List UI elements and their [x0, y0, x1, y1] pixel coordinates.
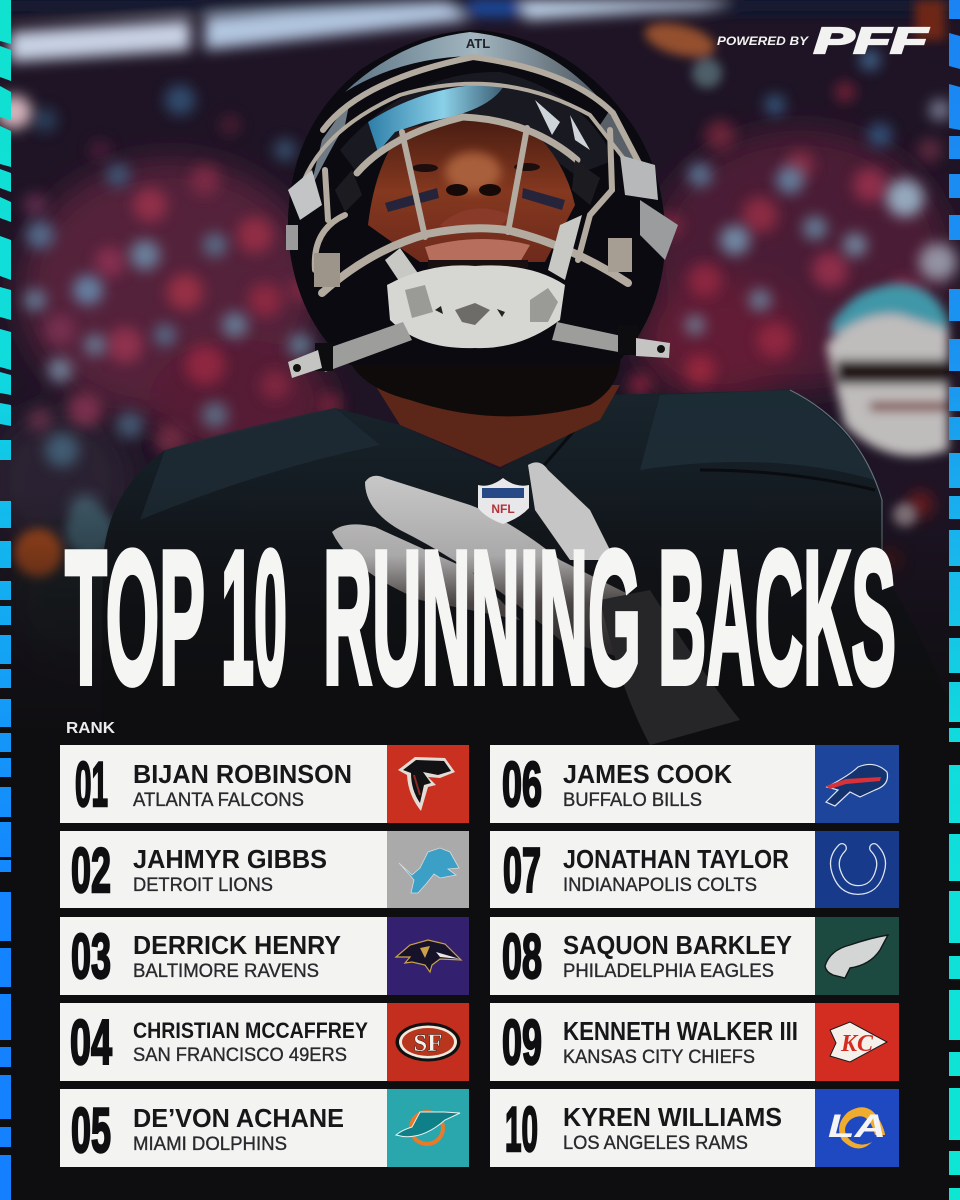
- icon: Ravens logo: [396, 940, 461, 972]
- row 05: De'Von Achane: [60, 1089, 469, 1167]
- row 06: James Cook: [490, 745, 899, 823]
- left colour strip: [0, 0, 11, 1200]
- face: [368, 120, 575, 262]
- row 07: Jonathan Taylor: 07: [503, 836, 541, 906]
- helmet side clips and pads: [335, 170, 362, 212]
- row 03: Derrick Henry: [60, 917, 469, 995]
- powered by PFF logo: PFF: [814, 20, 929, 61]
- row 02: Jahmyr Gibbs: DETROIT LIONS: [133, 874, 273, 896]
- visor reflection: [368, 84, 505, 152]
- gloved hands on chest: [332, 462, 740, 745]
- row 07: Jonathan Taylor: [490, 831, 899, 908]
- player helmet: [286, 30, 678, 378]
- background player on the right, out of focus: [826, 284, 948, 527]
- row 07: Jonathan Taylor: JONATHAN TAYLOR: [563, 844, 789, 874]
- row 03: Derrick Henry: 03: [71, 922, 111, 992]
- row 05: De'Von Achane: MIAMI DOLPHINS: [133, 1133, 287, 1155]
- row 10: Kyren Williams: [490, 1089, 899, 1167]
- row 08: Saquon Barkley: SAQUON BARKLEY: [563, 930, 792, 960]
- row 06: James Cook: JAMES COOK: [563, 759, 732, 789]
- powered by PFF logo: POWERED BY: [717, 34, 810, 48]
- icon: Chiefs arrowhead logo: KC: [840, 1031, 874, 1057]
- helmet chrome top: [345, 32, 605, 105]
- row 08: Saquon Barkley: 08: [502, 922, 542, 992]
- icon: Rams logo: LA: [828, 1108, 886, 1144]
- right colour strip: [949, 0, 960, 1200]
- chin straps: [317, 322, 412, 372]
- title: 10: [221, 512, 287, 724]
- row 08: Saquon Barkley: PHILADELPHIA EAGLES: [563, 960, 774, 982]
- icon: Rams logo: [828, 1107, 886, 1149]
- icon: Falcons logo: [398, 757, 455, 811]
- row 09: Kenneth Walker III: [490, 1003, 899, 1081]
- row 03: Derrick Henry: BALTIMORE RAVENS: [133, 960, 319, 982]
- icon: Chiefs arrowhead logo: [830, 1022, 887, 1062]
- row 01: Bijan Robinson: ATLANTA FALCONS: [133, 789, 304, 811]
- icon: Dolphins logo: [396, 1110, 460, 1146]
- row 10: Kyren Williams: LOS ANGELES RAMS: [563, 1132, 748, 1154]
- facemask bars: [300, 57, 640, 293]
- row 01: Bijan Robinson: 01: [75, 750, 108, 820]
- row 10: Kyren Williams: 10: [505, 1095, 538, 1165]
- icon: Colts horseshoe logo: [835, 848, 881, 890]
- row 06: James Cook: BUFFALO BILLS: [563, 789, 702, 811]
- top stadium lights: [0, 0, 960, 129]
- row 07: Jonathan Taylor: INDIANAPOLIS COLTS: [563, 874, 757, 896]
- row 06: James Cook: 06: [502, 750, 542, 820]
- icon: 49ers logo: [396, 1022, 460, 1062]
- row 02: Jahmyr Gibbs: JAHMYR GIBBS: [133, 844, 327, 874]
- player neck and beard: [345, 345, 621, 467]
- row 01: Bijan Robinson: [60, 745, 469, 823]
- row 04: Christian McCaffrey: SAN FRANCISCO 49ERS: [133, 1044, 347, 1066]
- fade to dark at bottom: [0, 490, 960, 740]
- row 02: Jahmyr Gibbs: [60, 831, 469, 908]
- icon: 49ers logo: SF: [413, 1030, 443, 1057]
- title: TOP: [65, 512, 205, 724]
- row 09: Kenneth Walker III: KENNETH WALKER III: [563, 1016, 798, 1046]
- row 09: Kenneth Walker III: 09: [502, 1008, 542, 1078]
- row 03: Derrick Henry: DERRICK HENRY: [133, 930, 341, 960]
- icon: Eagles logo: [825, 935, 888, 978]
- player helmet: ATL: [466, 36, 490, 51]
- visor: [340, 72, 615, 175]
- row 04: Christian McCaffrey: CHRISTIAN MCCAFFREY: [133, 1018, 368, 1043]
- title: [65, 512, 896, 724]
- row 01: Bijan Robinson: BIJAN ROBINSON: [133, 759, 352, 789]
- row 08: Saquon Barkley: [490, 917, 899, 995]
- rank column label: RANK: [66, 720, 116, 737]
- row 05: De'Von Achane: DE’VON ACHANE: [133, 1103, 344, 1133]
- icon: Bills logo: [826, 764, 888, 806]
- player jersey: [100, 390, 948, 760]
- powered by PFF logo: [717, 20, 929, 61]
- row 05: De'Von Achane: 05: [71, 1096, 111, 1166]
- chin cup: [387, 265, 565, 348]
- row 09: Kenneth Walker III: KANSAS CITY CHIEFS: [563, 1046, 755, 1068]
- row 10: Kyren Williams: KYREN WILLIAMS: [563, 1102, 782, 1132]
- NFL shield on jersey: [478, 478, 529, 524]
- row 02: Jahmyr Gibbs: 02: [71, 836, 111, 906]
- NFL shield on jersey: NFL: [491, 502, 515, 516]
- row 04: Christian McCaffrey: [60, 1003, 469, 1081]
- row 04: Christian McCaffrey: 04: [70, 1008, 112, 1078]
- icon: Lions logo: [399, 848, 459, 893]
